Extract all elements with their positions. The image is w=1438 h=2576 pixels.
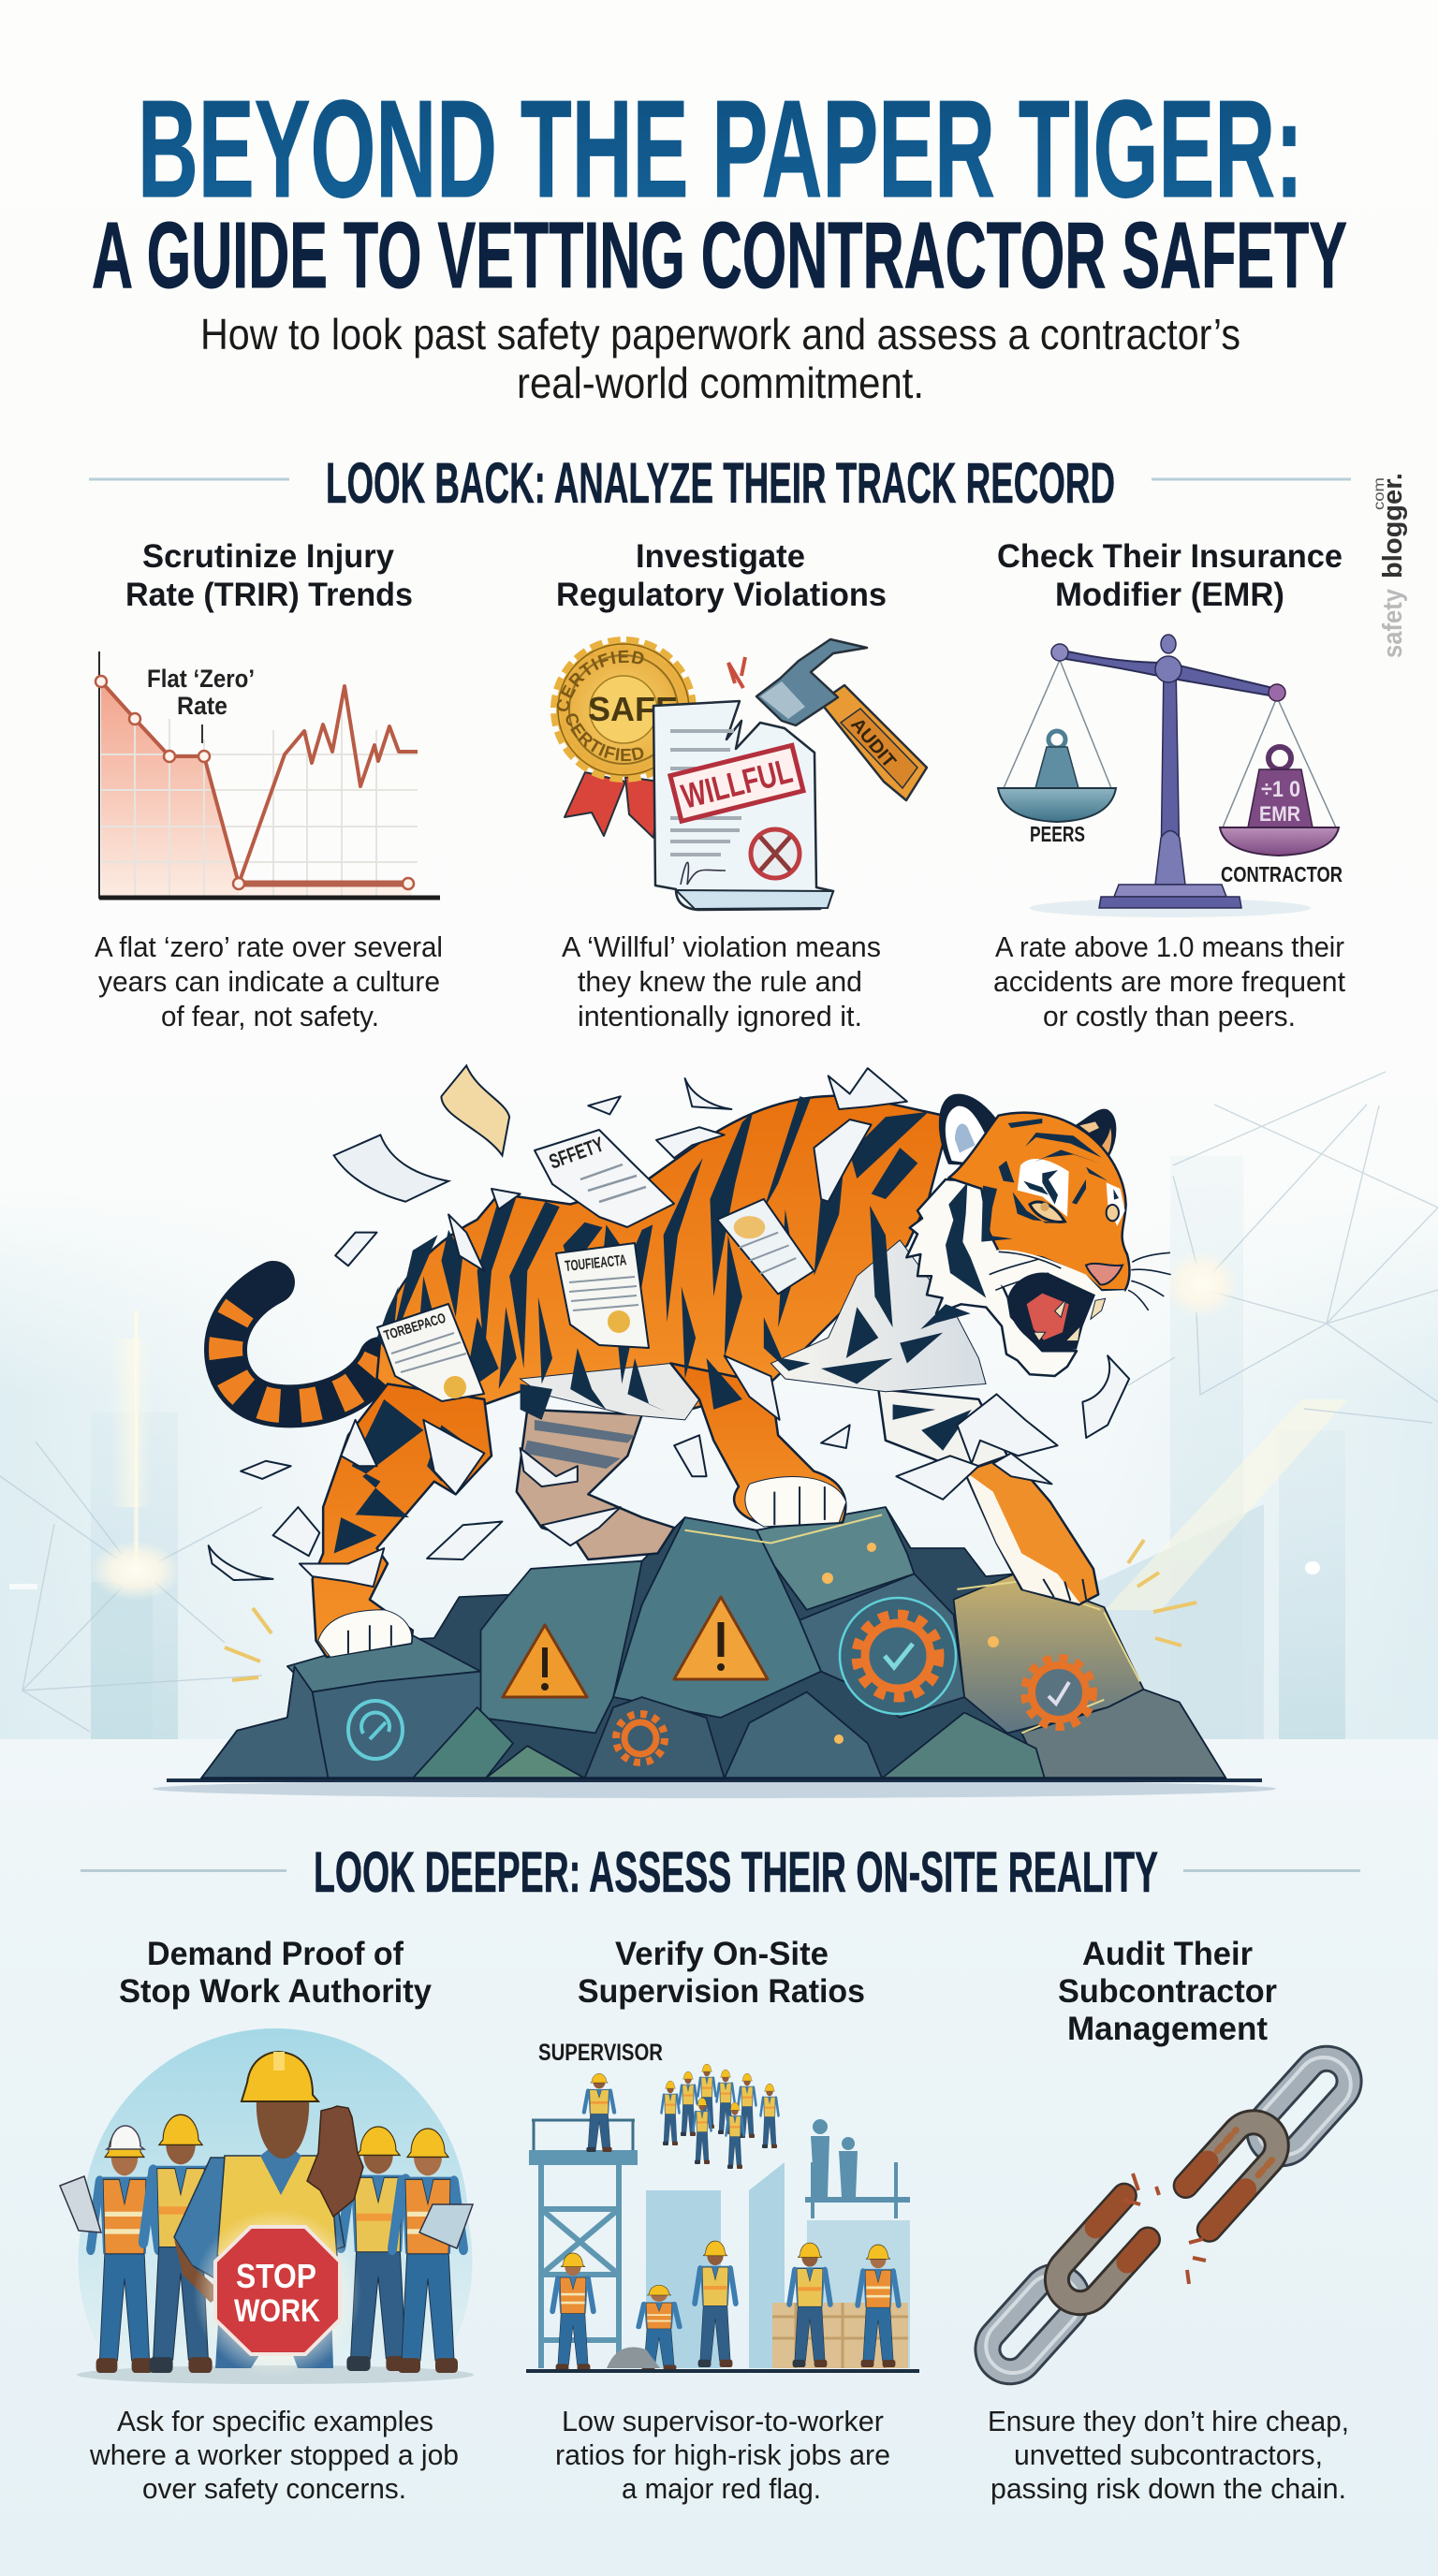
ground line [153,1778,1276,1798]
heading: regulatory violations [556,538,887,613]
illustration: balance scale [998,635,1343,917]
icon: certified seal [550,637,697,783]
heading: stop work [119,1936,433,2010]
description: TRIR: years can indicate a culture [98,965,440,998]
eyes [1030,1202,1119,1222]
backdrop circle [78,2028,473,2368]
open mouth [1008,1272,1095,1352]
link: bottom [975,2264,1091,2384]
illustration: broken chain [975,2046,1362,2384]
title [92,72,1347,308]
heading: EMR [997,538,1343,613]
icon: small gear [616,1714,665,1763]
orange head [948,1113,1129,1290]
description: supervision [555,2405,890,2505]
paper: safety sheet [535,1130,674,1227]
description: supervision: ratios for high-risk jobs are [555,2438,890,2471]
background buildings [646,2162,910,2368]
stripes [377,1096,943,1420]
stamp: willful [670,745,803,821]
description: subcontractor: unvetted subcontractors, [1014,2438,1323,2471]
heading: EMR: Check Their Insurance [997,538,1343,575]
white ruff [906,1179,1077,1376]
supervisor [584,2073,614,2152]
watermark: safetyblogger.com: blogger. [1378,473,1408,578]
watermark: safetyblogger.com [1372,473,1408,658]
worker: right with tablet [392,2129,473,2373]
near front leg [670,1364,846,1527]
line chart: TRIR trend: Rate [177,692,227,720]
description: TRIR: A flat ‘zero’ rate over several [95,930,443,963]
icon: certified seal: CERTIFIED [565,713,644,762]
white chest [770,1240,986,1392]
worker: woman with tablet [60,2126,158,2373]
whiskers [990,1251,1171,1310]
icon: hammer [728,639,927,800]
icon: peers weight and pan [998,731,1116,822]
description: supervision: a major red flag. [622,2472,821,2505]
line chart: TRIR trend [95,651,440,899]
icon: hammer: AUDIT [846,714,900,772]
link: upper broken [1175,2113,1286,2230]
heading: supervision: Verify On-Site [615,1936,829,1972]
subtitle [200,310,1240,407]
subtitle: How to look past safety paperwork and assess a contractor’s [200,310,1240,359]
rock pile [201,1507,1225,1778]
tiger head [906,1094,1171,1376]
illustration: balance scale: CONTRACTOR [1221,862,1343,886]
paper: toufieacta sheet: TOUFIEACTA [565,1252,627,1275]
description: EMR: or costly than peers. [1043,1000,1296,1032]
glowing rock lights [822,1543,999,1744]
icon: certified seal: SAFE [588,690,678,728]
link: lower broken [1048,2196,1159,2313]
heading: subcontractor: Subcontractor [1058,1973,1277,2010]
tiger tail [226,1282,380,1406]
description: supervision: Low supervisor-to-worker [562,2405,884,2437]
facial stripes [920,1119,1119,1329]
description: stop work: over safety concerns. [142,2472,406,2505]
icon: warning triangle left [503,1625,587,1697]
heading: subcontractor: Management [1067,2011,1268,2047]
illustration: seal, violation document and hammer [550,637,929,912]
description: violations: they knew the rule and [578,965,862,998]
description: stop work: Ask for specific examples [117,2405,433,2437]
icon: contractor weight and pan [1220,747,1339,856]
icon: torn violation document [653,701,833,910]
description: TRIR [95,930,443,1032]
icon: certified seal ribbon [565,772,660,838]
illustration: paper tiger on rocks [153,1065,1276,1798]
heading: subcontractor [1058,1936,1277,2047]
heading: EMR: Modifier (EMR) [1055,577,1284,613]
paper: toufieacta sheet [556,1243,649,1348]
icon: contractor weight and pan: ÷1 0 [1261,777,1300,802]
description: stop work [89,2405,459,2505]
nose [1086,1264,1123,1284]
icon: beam and pillar [1051,635,1285,908]
tiger body [313,1096,1098,1657]
worker: right yellow vest [341,2127,416,2371]
line chart: TRIR trend: Flat ‘Zero’ [147,665,255,693]
description: EMR: A rate above 1.0 means their [995,930,1344,963]
description: TRIR: of fear, not safety. [161,1000,379,1032]
right scaffold and silhouettes [805,2119,910,2218]
paper: safety sheet: SFFETY [546,1133,607,1174]
heading: regulatory violations: Regulatory Violations [556,577,887,613]
main torso [377,1096,950,1435]
heading: regulatory violations: Investigate [636,538,805,575]
description: EMR: accidents are more frequent [993,965,1345,998]
worker: central raising hand [174,2052,363,2368]
icon: teal recycle swirl [348,1701,403,1759]
hind leg [313,1383,492,1657]
description: subcontractor [988,2405,1349,2505]
ground workers [552,2241,899,2371]
heading: stop work: Stop Work Authority [119,1973,433,2010]
subtitle: real-world commitment. [517,359,924,407]
ears [939,1094,1116,1165]
description: violations: intentionally ignored it. [578,1000,862,1032]
description: subcontractor: passing risk down the chain. [990,2472,1346,2505]
heading: stop work: Demand Proof of [147,1936,404,1972]
illustration: balance scale: PEERS [1030,822,1085,846]
stop work sign: STOP [236,2257,316,2295]
heading: TRIR trends [125,538,413,613]
illustration: site supervision: SUPERVISOR [538,2040,663,2066]
heading: supervision: Supervision Ratios [578,1973,865,2010]
paper: torbepaco sheet [377,1304,484,1401]
far front leg [878,1389,1098,1604]
stop work sign [193,2209,361,2378]
heading: subcontractor: Audit Their [1082,1936,1253,1972]
stamp: willful: WILLFUL [678,752,796,816]
icon: glowing check gear [840,1598,956,1714]
paper: torbepaco sheet: TORBEPACO [382,1310,448,1344]
description: subcontractor: Ensure they don’t hire cheap, [988,2405,1349,2437]
scaffold tower [532,2120,635,2368]
worker: crossed arms [143,2115,218,2373]
stop work sign: WORK [234,2293,320,2329]
description: violations [562,930,881,1032]
cheek [983,1250,1125,1298]
illustration: workers with stop work sign [60,2028,474,2384]
heading: TRIR trends: Rate (TRIR) Trends [125,577,413,613]
description: EMR [993,930,1345,1032]
flying and torn paper scraps [209,1065,1129,1587]
description: violations: A ‘Willful’ violation means [562,930,881,963]
white brow [1018,1159,1069,1217]
far hind leg [517,1410,674,1559]
watermark: safetyblogger.com: safety [1378,589,1408,658]
link: top [1246,2046,1362,2166]
icon: warning triangle center [674,1597,768,1679]
watermark: safetyblogger.com: com [1372,477,1387,510]
icon: contractor weight and pan: EMR [1259,802,1300,826]
heading: TRIR trends: Scrutinize Injury [142,538,395,575]
crowd of workers [661,2064,779,2169]
sparks [225,1540,1196,1680]
icon: certified seal: CERTIFIED [556,650,644,711]
illustration: site supervision [526,2040,919,2373]
icon: check gear right [1025,1659,1093,1726]
belly [521,1364,707,1420]
sparks [1123,2174,1206,2284]
description: stop work: where a worker stopped a job [89,2438,459,2471]
heading: supervision [578,1936,865,2010]
